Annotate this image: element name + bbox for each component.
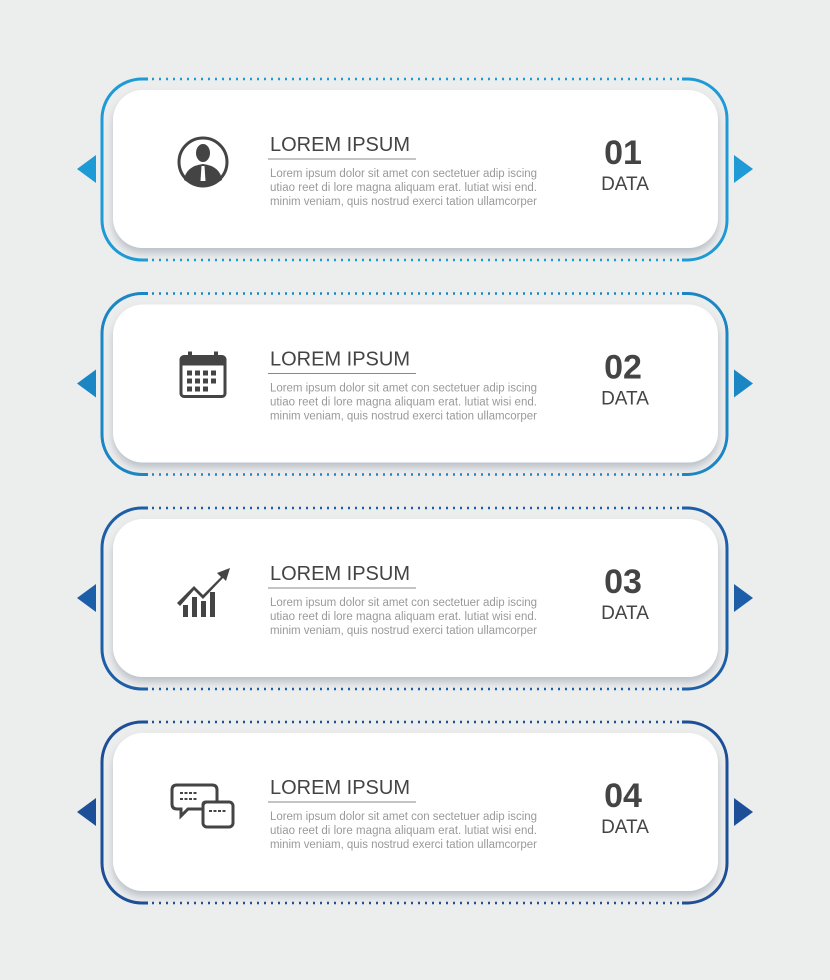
number: DATA: [601, 603, 649, 624]
number: DATA: [601, 174, 649, 195]
icon: calendar: [181, 352, 225, 396]
bracket frame: [102, 294, 727, 474]
number: 03: [604, 563, 642, 601]
heading: LOREM IPSUM: [270, 563, 410, 585]
panel: item 02: [77, 294, 753, 474]
card: [113, 304, 718, 462]
number: 04: [604, 777, 642, 815]
bracket frame: [102, 79, 727, 260]
panel: item 01: [77, 79, 753, 260]
arrows: [77, 155, 753, 183]
icon: person: [179, 138, 227, 186]
number: DATA: [601, 817, 649, 838]
text block: [270, 168, 537, 208]
arrows: [77, 584, 753, 612]
number: [601, 348, 649, 410]
text block: [270, 382, 537, 422]
bracket frame: [102, 508, 727, 689]
number: [601, 563, 649, 624]
number: [601, 777, 649, 838]
heading: LOREM IPSUM: [270, 348, 410, 370]
heading: LOREM IPSUM: [270, 777, 410, 799]
panel: item 03: [77, 508, 753, 689]
number: 01: [604, 134, 642, 172]
arrows: [77, 370, 753, 398]
icon: chat bubbles: [172, 785, 233, 827]
panel: item 04: [77, 722, 753, 903]
bracket frame: [102, 722, 727, 903]
heading: LOREM IPSUM: [270, 134, 410, 156]
card: [113, 733, 718, 891]
icon: growth chart: [177, 568, 230, 617]
arrows: [77, 798, 753, 826]
card: [113, 519, 718, 677]
number: DATA: [601, 388, 649, 410]
text block: [270, 597, 537, 637]
card: [113, 90, 718, 248]
text block: [270, 811, 537, 851]
number: [601, 134, 649, 195]
number: 02: [604, 348, 642, 386]
